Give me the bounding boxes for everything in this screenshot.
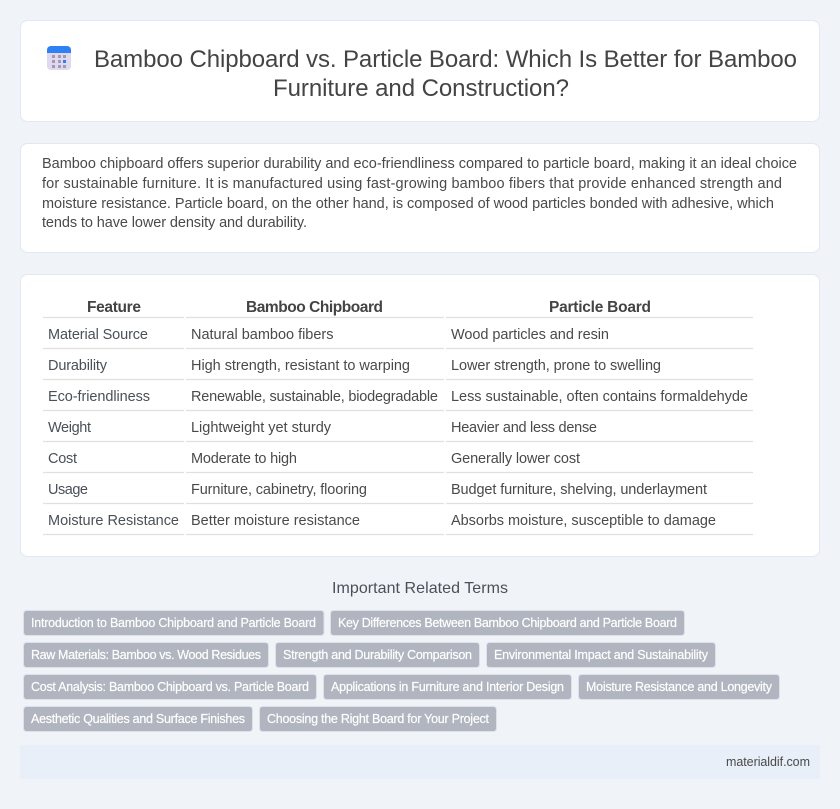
text block: introduction: tends to have lower density and durability. — [42, 215, 307, 231]
row: durability: Durability — [48, 358, 108, 374]
row: material source: Wood particles and resin — [451, 327, 609, 343]
row: usage: Budget furniture, shelving, underlayment — [451, 482, 707, 498]
row: durability — [48, 358, 661, 374]
tag: Aesthetic Qualities and Surface Finishes — [31, 712, 245, 726]
row: moisture resistance: Moisture Resistance — [48, 513, 179, 529]
panel: title card — [20, 20, 820, 122]
row: eco-friendliness: Less sustainable, often contains formaldehyde — [451, 389, 748, 405]
tag: Choosing the Right Board for Your Project — [267, 712, 490, 726]
table header — [87, 299, 651, 316]
row: usage: Usage — [48, 482, 88, 498]
panel: comparison table — [20, 274, 820, 556]
tag — [578, 674, 780, 700]
tag: Key Differences Between Bamboo Chipboard and Particle Board — [338, 616, 677, 630]
icon: calendar — [47, 46, 71, 70]
row: moisture resistance: Absorbs moisture, susceptible to damage — [451, 513, 716, 529]
row: weight: Lightweight yet sturdy — [191, 420, 332, 436]
title: Furniture and Construction? — [273, 75, 569, 102]
tag — [24, 642, 268, 668]
tag list: related terms — [24, 610, 780, 732]
row: material source — [48, 327, 609, 343]
row: cost: Cost — [48, 451, 77, 467]
tag — [486, 642, 716, 668]
row: material source: Material Source — [48, 327, 148, 343]
tag: Environmental Impact and Sustainability — [494, 648, 709, 662]
text block: introduction: moisture resistance. Particle board, on the other hand, is composed of wood particles bonded with adhesive, which — [42, 196, 774, 212]
tag: Raw Materials: Bamboo vs. Wood Residues — [31, 648, 261, 662]
row: material source: Natural bamboo fibers — [191, 327, 334, 343]
table header: Particle Board — [549, 299, 651, 316]
row: moisture resistance — [48, 513, 716, 529]
text block: introduction: Bamboo chipboard offers superior durability and eco-friendliness compared to particle board, making it an ideal choice — [42, 156, 797, 172]
tag: Applications in Furniture and Interior Design — [331, 680, 564, 694]
row: cost — [48, 451, 580, 467]
heading: related terms: Important Related Terms — [332, 580, 508, 597]
text block: introduction: for sustainable furniture. It is manufactured using fast-growing bamboo fibers that provide enhanced strength and — [42, 176, 782, 192]
tag — [330, 610, 684, 636]
row: moisture resistance: Better moisture resistance — [191, 513, 360, 529]
tag — [24, 674, 316, 700]
tag — [24, 706, 252, 732]
tag — [276, 642, 480, 668]
tag — [324, 674, 572, 700]
tag: Moisture Resistance and Longevity — [586, 680, 773, 694]
tag — [260, 706, 496, 732]
footer — [20, 745, 820, 779]
tag — [24, 610, 324, 636]
text block: introduction — [42, 156, 797, 231]
title — [94, 46, 797, 102]
row: durability: High strength, resistant to warping — [191, 358, 410, 374]
tag: Cost Analysis: Bamboo Chipboard vs. Particle Board — [31, 680, 309, 694]
row: weight: Weight — [48, 420, 91, 436]
row: usage — [48, 482, 707, 498]
row: cost: Generally lower cost — [451, 451, 580, 467]
table header: Bamboo Chipboard — [246, 299, 383, 316]
row: eco-friendliness: Renewable, sustainable, biodegradable — [191, 389, 438, 405]
footer: materialdif.com — [726, 755, 810, 769]
row: cost: Moderate to high — [191, 451, 297, 467]
tag: Introduction to Bamboo Chipboard and Particle Board — [31, 616, 316, 630]
row: durability: Lower strength, prone to swelling — [451, 358, 661, 374]
row: weight: Heavier and less dense — [451, 420, 597, 436]
title: Bamboo Chipboard vs. Particle Board: Which Is Better for Bamboo — [94, 46, 797, 73]
panel: introduction paragraph — [20, 144, 820, 252]
row: weight — [48, 420, 597, 436]
table header: Feature — [87, 299, 141, 316]
row: eco-friendliness — [48, 389, 748, 405]
row: usage: Furniture, cabinetry, flooring — [191, 482, 367, 498]
row: eco-friendliness: Eco-friendliness — [48, 389, 150, 405]
tag: Strength and Durability Comparison — [283, 648, 472, 662]
